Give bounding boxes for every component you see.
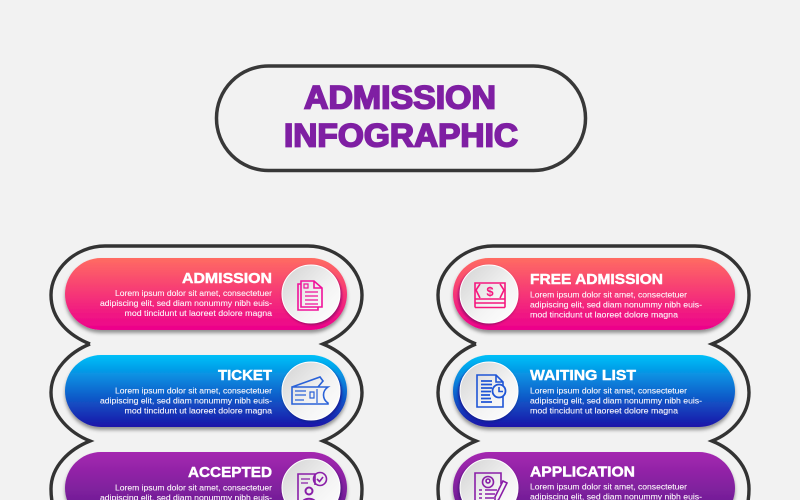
text: accepted body: Lorem ipsum dolor sit amet, consectetuer [115, 482, 272, 492]
title: ADMISSION [304, 80, 496, 116]
icon: application form and pencil [460, 459, 518, 500]
left column outline [51, 246, 362, 500]
text: admission body: mod tincidunt ut laoreet dolore magna [124, 308, 272, 318]
panel: accepted [65, 452, 347, 500]
text: ticket body: Lorem ipsum dolor sit amet, consectetuer [115, 386, 272, 396]
text: admission body: adipiscing elit, sed diam nonummy nibh euis- [100, 298, 272, 308]
right column outline [438, 246, 749, 500]
text: waiting list body: Lorem ipsum dolor sit amet, consectetuer [530, 386, 687, 396]
title: INFOGRAPHIC [284, 118, 518, 154]
text: admission body: Lorem ipsum dolor sit amet, consectetuer [115, 288, 272, 298]
text: free admission body [530, 290, 702, 320]
icon: money: $ [486, 284, 494, 299]
icon: document with clock [460, 362, 518, 420]
panel: application [453, 452, 735, 500]
text: free admission body: mod tincidunt ut laoreet dolore magna [530, 310, 678, 320]
text: ticket body [100, 386, 272, 416]
text: admission body [100, 288, 272, 318]
icon: accepted document [282, 459, 340, 500]
panel: admission [65, 258, 347, 330]
heading: admission: ADMISSION [182, 270, 272, 287]
icon: money [460, 265, 518, 323]
text: application body: Lorem ipsum dolor sit amet, consectetuer [530, 482, 687, 492]
text: waiting list body: adipiscing elit, sed diam nonummy nibh euis- [530, 396, 702, 406]
text: application body [530, 482, 702, 500]
panel: free admission [453, 258, 735, 330]
heading: application: APPLICATION [530, 464, 635, 480]
text: waiting list body: mod tincidunt ut laoreet dolore magna [530, 406, 678, 416]
text: free admission body: adipiscing elit, sed diam nonummy nibh euis- [530, 300, 702, 310]
heading: waiting list: WAITING LIST [530, 367, 636, 384]
text: free admission body: Lorem ipsum dolor sit amet, consectetuer [530, 290, 687, 300]
text: waiting list body [530, 386, 702, 416]
panel: waiting list [453, 355, 735, 427]
text: accepted body [100, 482, 272, 500]
heading: accepted: ACCEPTED [188, 464, 272, 481]
title [284, 80, 518, 154]
panel: ticket [65, 355, 347, 427]
icon: documents [282, 265, 340, 323]
heading: ticket: TICKET [218, 367, 272, 384]
title panel [216, 66, 586, 170]
text: ticket body: adipiscing elit, sed diam nonummy nibh euis- [100, 396, 272, 406]
icon: ticket [282, 362, 340, 420]
text: ticket body: mod tincidunt ut laoreet dolore magna [124, 406, 272, 416]
heading: free admission: FREE ADMISSION [530, 271, 663, 288]
